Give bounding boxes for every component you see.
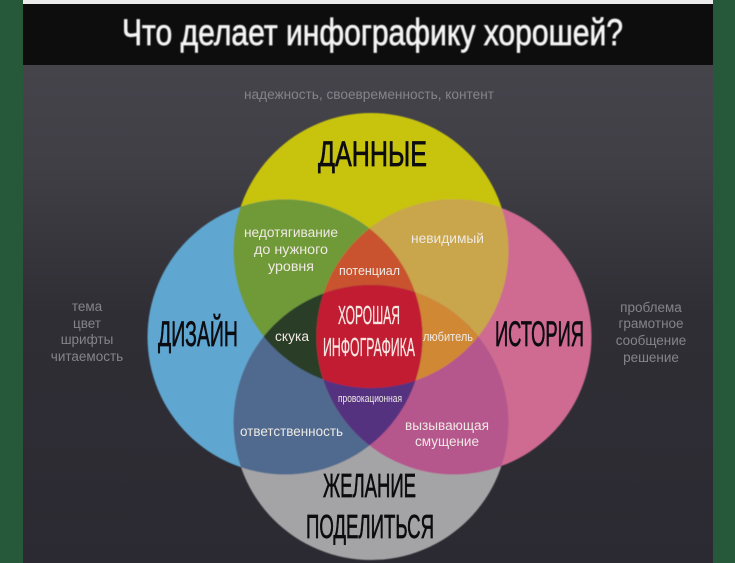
label: amateur: любитель [423,330,473,344]
heading: story: ИСТОРИЯ [495,315,584,354]
label: embarrassing [405,418,489,449]
region: data and design [233,198,370,337]
left caption list [51,299,123,364]
circle: data [234,113,508,388]
right caption list: сообщение [616,333,686,348]
header band [23,4,713,65]
heading: shareability: ЖЕЛАНИЕ [323,467,416,504]
label: invisible: невидимый [411,231,484,246]
heading: shareability [306,467,434,545]
label: embarrassing: вызывающая [405,418,489,433]
right caption list: проблема [620,300,682,315]
label: provocative: провокационная [338,393,402,405]
label: falls short [244,225,338,274]
region: good infographic [316,284,424,389]
left caption list: цвет [73,316,101,331]
heading: design: ДИЗАЙН [158,314,238,354]
label: embarrassing: смущение [415,434,479,449]
region: data and story [369,198,509,336]
region: story and shareability [369,336,509,475]
right caption list: решение [623,350,679,365]
top white strip [23,0,713,4]
top caption: надежность, своевременность, контент [244,87,494,102]
heading: shareability: ПОДЕЛИТЬСЯ [306,508,434,545]
left caption list: читаемость [51,349,123,364]
region: amateur [316,292,478,381]
left caption list: шрифты [61,332,113,347]
center label: ХОРОШАЯ [338,300,400,330]
region: potential [324,228,416,294]
region: provocative [316,285,422,446]
text: ИНФОГРАФИКА [323,332,415,362]
venn diagram [140,100,600,563]
label: potential: потенциал [339,264,400,278]
label: falls short: уровня [268,259,314,274]
title: Что делает инфографику хорошей? [122,12,623,53]
label: responsibility: ответственность [240,424,343,439]
label: falls short: недотягивание [244,225,338,240]
circle: shareability [234,285,508,560]
label: boredom: скука [275,329,309,344]
center label [323,300,415,362]
right caption list [616,300,686,365]
heading: data: ДАННЫЕ [318,135,427,174]
right caption list: грамотное [618,316,684,331]
region: design and shareability [232,336,370,475]
left caption list: тема [72,299,103,314]
label: falls short: до нужного [254,242,328,257]
circle: design [148,200,422,474]
region: boredom [264,293,324,380]
circle: story [316,200,592,474]
